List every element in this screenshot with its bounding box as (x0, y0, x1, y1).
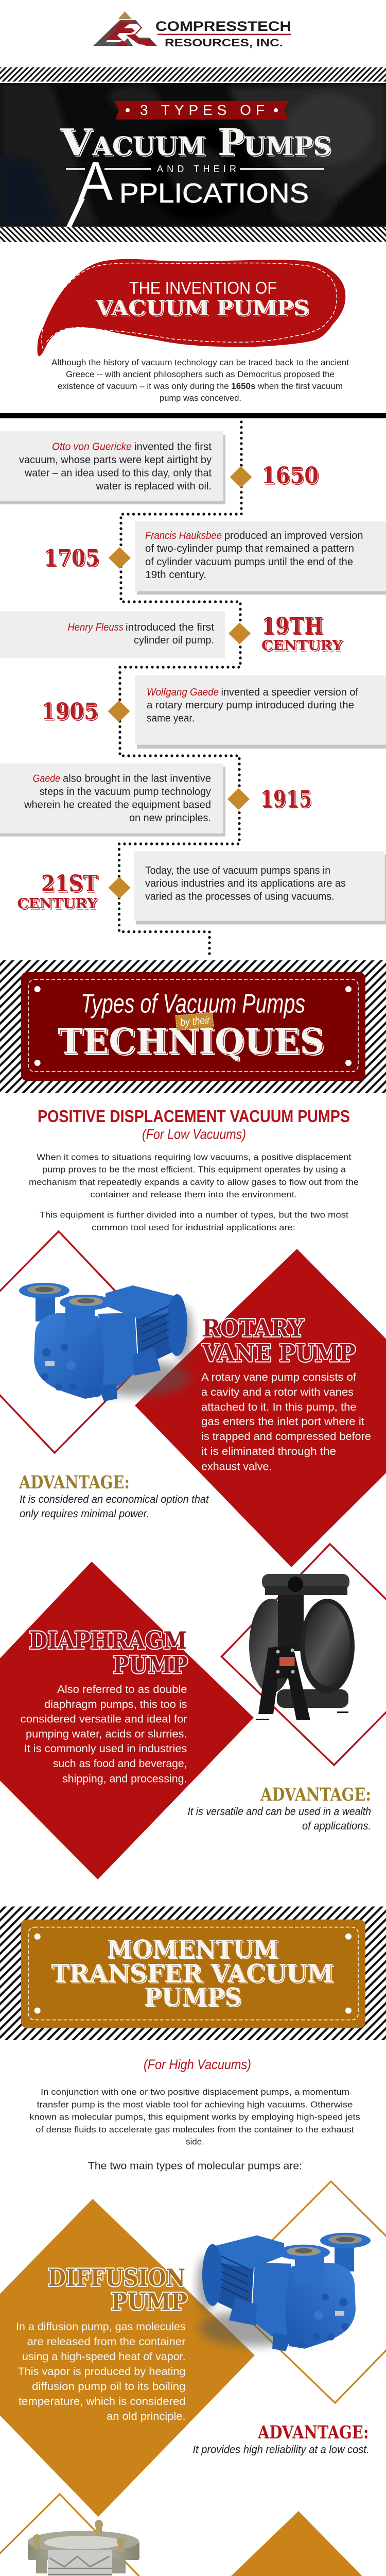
positive displacement paragraph: This equipment is further divided into a number of types, but the two most (39, 1210, 348, 1219)
ribbon: 3 types of (114, 101, 288, 120)
timeline entry 1905: same year. (147, 713, 195, 724)
techniques heading: TECHNIQUES (58, 1021, 324, 1062)
hero title: applications: PPLICATIONS (119, 178, 309, 209)
diffusion pump text: are released from the container (27, 2336, 186, 2348)
diaphragm pump text: Also referred to as double (57, 1684, 187, 1696)
diffusion advantage (192, 2422, 370, 2456)
intro paragraph: pump was conceived. (160, 393, 241, 403)
timeline entry 19th century: Henry Fleuss (68, 622, 124, 633)
rotary advantage: It is considered an economical option that (20, 1494, 209, 1505)
rotary vane pump diamond (135, 1249, 386, 1567)
timeline entry 19th century (0, 611, 343, 658)
timeline entry 19th century: 19TH (261, 613, 323, 639)
rotary vane pump text: ROTARY (202, 1314, 304, 1342)
hero title: applications: A (78, 151, 113, 212)
rotary vane pump text: attached to it. In this pump, the (201, 1401, 357, 1413)
timeline entry 21st century: various industries and its applications are as (145, 878, 346, 889)
company logo (93, 11, 291, 49)
timeline entry 19th century: CENTURY (261, 638, 343, 654)
positive displacement paragraph: When it comes to situations requiring low vacuums, a positive displacement (37, 1153, 352, 1162)
diaphragm pump diamond (0, 1562, 254, 1879)
momentum transfer paragraph: of dense fluids to accelerate gas molecules from the container to the exhaust (36, 2125, 354, 2134)
timeline entry 1650: 1650 (261, 463, 319, 489)
timeline entry 19th century: cylinder oil pump. (134, 635, 214, 646)
momentum transfer heading: PUMPS (144, 1983, 241, 2012)
momentum transfer heading (51, 1935, 334, 2012)
invention heading blob (37, 259, 345, 357)
diaphragm pump text (21, 1626, 188, 1785)
timeline entry 1905 (41, 675, 386, 749)
timeline entry 1705: Francis Hauksbee (145, 530, 222, 541)
rotary advantage (19, 1472, 209, 1520)
timeline entry 21st century: CENTURY (17, 896, 97, 912)
timeline entry 21st century (17, 852, 386, 924)
diaphragm pump text: It is commonly used in industries (24, 1743, 187, 1755)
timeline entry 1650: vacuum, whose parts were kept airtight by (19, 454, 212, 466)
rotary vane pump text: gas enters the inlet port where it (201, 1416, 364, 1428)
rotary advantage: only requires minimal power. (20, 1508, 149, 1520)
timeline entry 1650: Otto von Guericke (52, 441, 132, 452)
rotary pump frame (0, 1231, 164, 1453)
timeline entry 1705: 19th century. (145, 569, 206, 581)
timeline entry 19th century: introduced the first (126, 622, 214, 633)
timeline entry 1705 (44, 521, 386, 595)
timeline entry 1650: water – an idea used to this day, only that (24, 468, 212, 479)
logo wordmark (155, 19, 291, 49)
diaphragm advantage (187, 1784, 371, 1832)
logo wordmark: RESOURCES, INC. (165, 37, 283, 49)
timeline entry 21st century: 21ST (41, 871, 98, 897)
timeline entry 21st century: varied as the processes of using vacuums. (145, 891, 335, 903)
ribbon: 3 types of: 3 TYPES OF (140, 102, 265, 118)
timeline entry 1915 (0, 764, 312, 837)
diaphragm pump text: considered versatile and ideal for (21, 1714, 187, 1725)
momentum transfer subheading: (For High Vacuums) (144, 2057, 251, 2072)
hero title: applications (66, 151, 309, 227)
diaphragm pump illustration (249, 1574, 355, 1720)
diffusion pump text: DIFFUSION (48, 2264, 185, 2292)
diaphragm advantage: It is versatile and can be used in a wealth (187, 1806, 371, 1818)
positive displacement heading (38, 1107, 350, 1142)
script heading: Types of Vacuum Pumps (81, 989, 305, 1019)
positive displacement paragraph: container and release them into the environment. (91, 1190, 297, 1199)
rotary pump illustration (19, 1283, 192, 1401)
diaphragm pump text: PUMP (113, 1651, 188, 1679)
intro paragraph: existence of vacuum – it was only during the 1650s when the first vacuum (58, 381, 343, 391)
timeline entry 1905: Wolfgang Gaede (147, 687, 219, 698)
momentum transfer paragraph: In conjunction with one or two positive displacement pumps, a momentum (41, 2087, 349, 2097)
timeline entry 1705: produced an improved version (224, 530, 363, 541)
section banner: types by techniques (0, 960, 386, 1093)
diffusion pump frame (220, 2181, 386, 2403)
hero title: vacuum pumps (60, 121, 331, 164)
timeline entry 1915: steps in the vacuum pump technology (39, 786, 211, 798)
timeline entry 1915: Gaede (33, 773, 60, 785)
intro paragraph: Greece -- with ancient philosophers such as Democritus proposed the (66, 369, 335, 379)
timeline entry 1905: invented a speedier version of (221, 687, 358, 698)
section banner: momentum transfer (0, 1906, 386, 2040)
positive displacement paragraph: common tool used for industrial applications are: (92, 1223, 295, 1232)
rotary vane pump text (201, 1314, 371, 1472)
momentum transfer paragraph: side. (186, 2137, 204, 2146)
timeline entry 1705: 1705 (44, 545, 99, 571)
timeline entry 1650 (0, 431, 319, 504)
timeline entry 1650: water is replaced with oil. (95, 481, 212, 492)
momentum transfer paragraph: The two main types of molecular pumps are: (88, 2161, 302, 2172)
diffusion advantage: It provides high reliability at a low cost. (192, 2444, 370, 2456)
hero banner (0, 67, 386, 242)
diffusion pump text: diffusion pump oil to its boiling (32, 2381, 186, 2393)
diffusion pump text: This vapor is produced by heating (17, 2366, 186, 2378)
timeline entry 1915: wherein he created the equipment based (24, 800, 211, 811)
rotary vane pump text: a cavity and a rotor with vanes (201, 1386, 354, 1398)
timeline entry 1915: 1915 (260, 786, 312, 812)
diaphragm pump text: DIAPHRAGM (29, 1626, 187, 1654)
diffusion pump illustration (197, 2233, 371, 2351)
positive displacement paragraph: mechanism that repeatedly expands a cavity to allow gases to flow out from the (29, 1177, 359, 1187)
rotary vane pump text: A rotary vane pump consists of (201, 1371, 356, 1383)
timeline entry 1705: of two-cylinder pump that remained a pattern (145, 543, 354, 554)
momentum transfer heading: MOMENTUM (107, 1935, 278, 1964)
diaphragm pump text: such as food and beverage, (53, 1758, 187, 1770)
hero title: vacuum pumps: V (60, 121, 93, 164)
invention heading text: VACUUM PUMPS (95, 296, 309, 320)
momentum transfer paragraph (29, 2087, 360, 2172)
timeline entry 1905: 1905 (41, 699, 98, 725)
momentum transfer heading: TRANSFER VACUUM (51, 1959, 334, 1988)
diaphragm pump frame (221, 1544, 386, 1765)
hero title: vacuum pumps: P (218, 121, 244, 164)
timeline entry 1905: a rotary mercury pump introduced during the (147, 700, 354, 711)
rotary vane pump text: exhaust valve. (201, 1461, 272, 1472)
diffusion pump text: In a diffusion pump, gas molecules (16, 2321, 186, 2333)
hero title: vacuum pumps: ACUUM (92, 131, 206, 161)
diaphragm pump text: shipping, and processing. (62, 1773, 187, 1785)
positive displacement heading: (For Low Vacuums) (142, 1127, 246, 1142)
invention heading text (95, 278, 309, 320)
positive displacement paragraph (29, 1153, 359, 1232)
timeline entry 1915: on new principles. (129, 812, 211, 824)
diffusion pump text: using a high-speed heat of vapor. (22, 2351, 186, 2363)
diffusion pump text (16, 2264, 187, 2422)
rotary vane pump text: it is eliminated through the (201, 1446, 336, 1458)
logo wordmark: COMPRESSTECH (155, 19, 291, 34)
turbomolecular pump frame (0, 2494, 168, 2576)
rotary vane pump text: is trapped and compressed before (201, 1431, 371, 1443)
diffusion pump diamond (0, 2199, 255, 2517)
turbomolecular pump illustration (28, 2520, 139, 2576)
intro paragraph (51, 358, 349, 403)
tag: by their: by their (180, 1014, 211, 1028)
diaphragm pump text: pumping water, acids or slurries. (26, 1728, 187, 1740)
diaphragm pump text: diaphragm pumps, this too is (44, 1699, 187, 1710)
diaphragm advantage: of applications. (302, 1820, 371, 1832)
diffusion pump text: temperature, which is considered (19, 2396, 186, 2408)
timeline dotted path (119, 422, 241, 958)
momentum transfer paragraph: known as molecular pumps, this equipment works by employing high-speed jets (29, 2112, 360, 2122)
timeline entry 1915: also brought in the last inventive (63, 773, 211, 785)
rotary vane pump text: VANE PUMP (202, 1340, 356, 1367)
momentum transfer paragraph: transfer pump is the most viable tool for achieving high vacuums. Otherwise (37, 2100, 353, 2110)
rotary advantage: ADVANTAGE: (19, 1472, 130, 1493)
tag: by their (176, 1012, 214, 1030)
diffusion pump text: PUMP (111, 2287, 187, 2315)
timeline entry 21st century: Today, the use of vacuum pumps spans in (145, 865, 330, 876)
diffusion pump text: an old principle. (107, 2411, 186, 2422)
intro paragraph: Although the history of vacuum technology can be traced back to the ancient (51, 358, 349, 367)
invention heading text: THE INVENTION OF (129, 278, 277, 297)
turbomolecular pump diamond (136, 2511, 386, 2576)
timeline entry 1705: of cylinder vacuum pumps until the end of the (145, 556, 353, 568)
timeline entry 1650: invented the first (134, 441, 212, 452)
hero subtitle: and their (66, 164, 324, 174)
hero subtitle: and their: AND THEIR (157, 164, 236, 174)
hero title: vacuum pumps: UMPS (243, 131, 331, 161)
positive displacement paragraph: pump proves to be the most efficient. This equipment operates by using a (42, 1165, 346, 1175)
